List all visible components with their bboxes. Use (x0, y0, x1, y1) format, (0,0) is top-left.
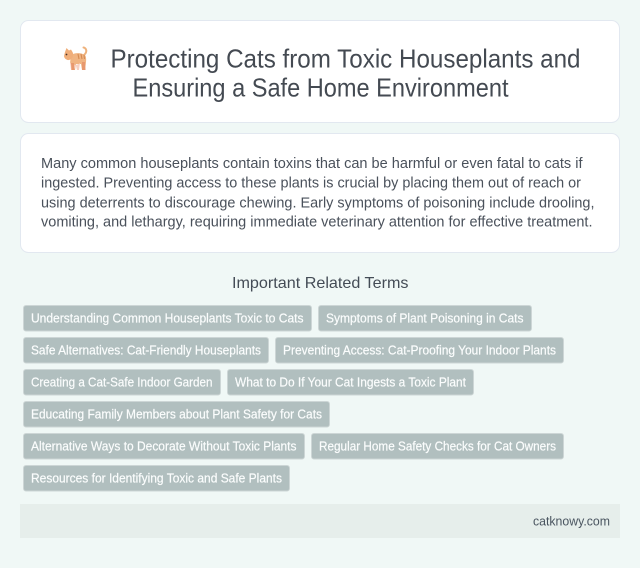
icon: cat (64, 48, 86, 70)
tag: common toxic houseplants (24, 306, 312, 331)
title text: Protecting Cats from Toxic Houseplants and (110, 46, 580, 74)
footer bar (20, 504, 620, 538)
tag: resources: Resources for Identifying Toxic and Safe Plants (31, 470, 282, 486)
tag: indoor garden: Creating a Cat-Safe Indoor Garden (31, 374, 212, 390)
tag: resources (24, 466, 290, 491)
tag: safety checks (312, 434, 564, 459)
tag: symptoms: Symptoms of Plant Poisoning in Cats (326, 310, 524, 326)
tag: symptoms (318, 306, 532, 331)
tag: safe alternatives (24, 338, 268, 363)
tag: preventing access: Preventing Access: Cat-Proofing Your Indoor Plants (283, 342, 556, 358)
tag: educating family (24, 402, 330, 427)
tag list: related terms (24, 306, 564, 491)
summary paragraph: using deterrents to discourage chewing. Early symptoms of poisoning include drooling, (41, 196, 594, 212)
tag: indoor garden (24, 370, 220, 395)
tag: educating family: Educating Family Members about Plant Safety for Cats (31, 406, 322, 422)
tag: decorating alternatives: Alternative Ways to Decorate Without Toxic Plants (31, 438, 296, 454)
summary paragraph: ingested. Preventing access to these plants is crucial by placing them out of reach or (41, 176, 581, 192)
title text: Ensuring a Safe Home Environment (132, 74, 508, 102)
tag: safety checks: Regular Home Safety Checks for Cat Owners (319, 438, 556, 454)
panel: summary card (20, 134, 620, 252)
tag: decorating alternatives (24, 434, 304, 459)
panel: title card (20, 20, 620, 122)
footer source text: catknowy.com (533, 514, 610, 528)
summary paragraph: Many common houseplants contain toxins that can be harmful or even fatal to cats if (41, 156, 583, 172)
tag: preventing access (276, 338, 564, 363)
tag: what to do (228, 370, 474, 395)
tag: common toxic houseplants: Understanding Common Houseplants Toxic to Cats (31, 310, 304, 326)
tag: safe alternatives: Safe Alternatives: Cat-Friendly Houseplants (31, 342, 261, 358)
tag: what to do: What to Do If Your Cat Ingests a Toxic Plant (235, 374, 466, 390)
summary paragraph: vomiting, and lethargy, requiring immediate veterinary attention for effective treatment. (41, 214, 592, 230)
heading: related terms: Important Related Terms (232, 275, 408, 292)
